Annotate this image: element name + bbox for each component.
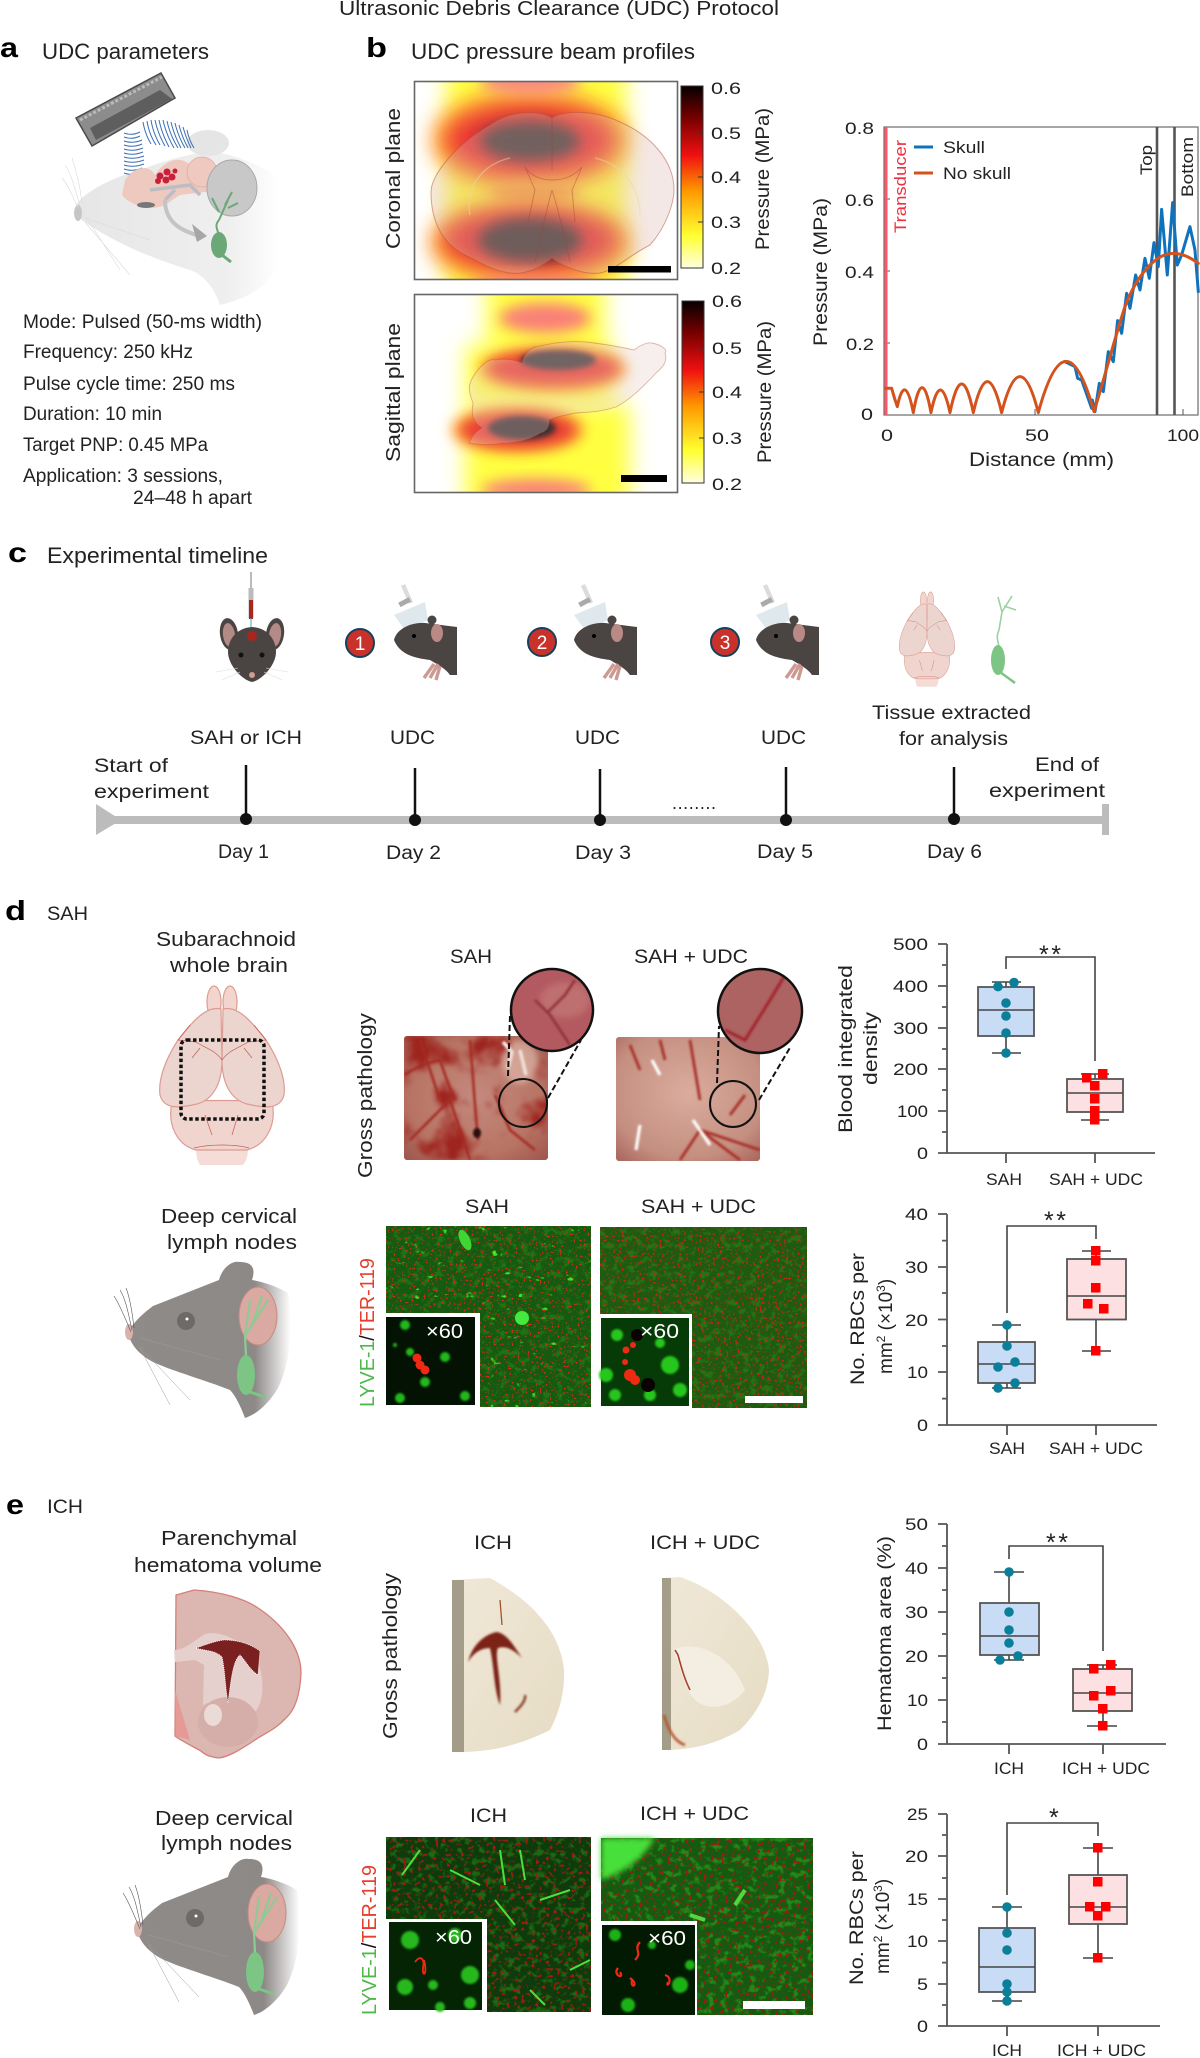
badge: 2: 2 (537, 633, 547, 654)
box plot: RBCs per mm2 in ICH (847, 1804, 1160, 2058)
micrograph: ICH + UDC (601, 1838, 813, 2015)
panel b: UDC pressure beam profiles (366, 32, 1199, 525)
panel d: SAH (5, 895, 1157, 1458)
coronal colour bar: 0.5 (711, 124, 741, 143)
box plot: RBCs per mm2 in ICH: 3 (871, 1885, 885, 1892)
box plot: blood integrated density: 300 (893, 1019, 928, 1038)
deep cervical lymph nodes heading (155, 1808, 293, 1855)
icon: mouse with transducer 2 (574, 585, 637, 680)
SAH column label: SAH (450, 947, 492, 968)
day labels: Day 3 (575, 843, 631, 864)
box plot: RBCs per mm2 in SAH: 3 (874, 1285, 888, 1292)
event labels: UDC (390, 728, 435, 749)
box plot: hematoma area: 10 (907, 1691, 928, 1710)
stain label: LYVE-1/TER-119 (357, 1258, 379, 1407)
event labels: for analysis (899, 729, 1008, 750)
deep cervical lymph nodes heading: Deep cervical (161, 1206, 297, 1228)
micrograph: ICH (386, 1837, 591, 2012)
gross pathology label: Gross pathology (355, 1013, 377, 1178)
box plot: hematoma area (875, 1515, 1166, 1778)
coronal colour bar: Pressure (MPa) (753, 108, 774, 250)
panel b heading: UDC pressure beam profiles (411, 39, 695, 64)
badge: 1 (346, 629, 374, 657)
stain label: LYVE-1/TER-119 (359, 1865, 381, 2015)
line chart: pressure vs distance: 100 (1167, 426, 1199, 445)
subarachnoid heading: whole brain (169, 955, 288, 977)
icon: lymph node neuron (991, 596, 1016, 683)
box plot: RBCs per mm2 in SAH: ** (1044, 1207, 1066, 1235)
photo: SAH + UDC brain surface (616, 1037, 760, 1161)
box plot: RBCs per mm2 in SAH: mm (876, 1342, 897, 1374)
box plot: RBCs per mm2 in ICH: 25 (907, 1805, 928, 1824)
coronal colour bar: 0.3 (711, 213, 741, 232)
panel c label: c (8, 537, 27, 568)
panel e label: e (6, 1489, 24, 1520)
box plot: RBCs per mm2 in ICH: 2 (871, 1935, 885, 1942)
box plot: RBCs per mm2 in ICH: 15 (907, 1890, 928, 1909)
box plot: hematoma area: 50 (905, 1515, 928, 1534)
box plot: blood integrated density: SAH + UDC (1049, 1170, 1143, 1189)
ICH microscopy label: ICH (470, 1806, 507, 1827)
line chart: pressure vs distance: Skull (943, 138, 985, 157)
box plot: RBCs per mm2 in SAH: No. RBCs per (848, 1252, 869, 1385)
deep cervical lymph nodes heading (161, 1206, 297, 1254)
parameter list: Mode: Pulsed (50-ms width) (23, 312, 262, 333)
deep cervical lymph nodes heading: Deep cervical (155, 1808, 293, 1830)
coronal colour bar: 0.4 (711, 168, 741, 187)
parameter list: 24–48 h apart (133, 488, 253, 509)
event labels (94, 703, 1106, 803)
box plot: RBCs per mm2 in SAH: 20 (905, 1311, 928, 1330)
panel a label: a (0, 32, 18, 63)
sagittal colour bar: 0.5 (712, 339, 742, 358)
box plot: blood integrated density: SAH (986, 1170, 1022, 1189)
panel a heading: UDC parameters (42, 39, 209, 64)
line chart: pressure vs distance: Bottom (1178, 137, 1197, 197)
sagittal heatmap (414, 294, 678, 494)
line chart: pressure vs distance: 0.8 (845, 119, 874, 138)
line chart: pressure vs distance: 50 (1025, 426, 1049, 445)
box plot: blood integrated density: 0 (917, 1144, 928, 1163)
day labels: Day 1 (218, 842, 269, 863)
icon: mouse with transducer 3 (756, 585, 819, 680)
box plot: RBCs per mm2 in ICH: 10 (907, 1932, 928, 1951)
panel e heading: ICH (47, 1497, 83, 1518)
box plot: RBCs per mm2 in SAH: ) (876, 1279, 897, 1285)
box plot: hematoma area: 0 (917, 1735, 928, 1754)
magnified inset: SAH (508, 969, 593, 1098)
box plot: RBCs per mm2 in SAH: 40 (905, 1205, 928, 1224)
ICH column label: ICH (474, 1533, 512, 1554)
day labels: Day 6 (927, 842, 982, 863)
panel e: ICH (6, 1489, 1166, 2058)
parameter list: Frequency: 250 kHz (23, 342, 193, 363)
box plot: blood integrated density: density (861, 1011, 882, 1085)
line chart: pressure vs distance: No skull (943, 164, 1011, 183)
event labels: SAH or ICH (190, 728, 302, 749)
box plot: hematoma area: ICH (994, 1759, 1024, 1778)
box plot: blood integrated density: ** (1039, 941, 1061, 969)
box plot: RBCs per mm2 in ICH: 5 (917, 1975, 928, 1994)
event labels: Tissue extracted (872, 703, 1031, 724)
panel b label: b (366, 32, 387, 63)
gross pathology label: Gross pathology (380, 1573, 402, 1739)
sagittal colour bar: 0.2 (712, 475, 742, 494)
coronal plane label: Coronal plane (383, 108, 405, 249)
event labels: Start of (94, 756, 169, 777)
subarachnoid heading (156, 929, 296, 977)
panel c heading: Experimental timeline (47, 543, 268, 568)
deep cervical lymph nodes heading: lymph nodes (167, 1232, 297, 1254)
coronal heatmap (414, 80, 678, 280)
parameter list: Target PNP: 0.45 MPa (23, 435, 208, 456)
box plot: RBCs per mm2 in ICH: 0 (917, 2017, 928, 2036)
line chart: pressure vs distance: 0.6 (845, 191, 874, 210)
box plot: RBCs per mm2 in ICH: (×10 (873, 1892, 894, 1936)
subarachnoid heading: Subarachnoid (156, 929, 296, 951)
box plot: RBCs per mm2 in ICH: No. RBCs per (847, 1850, 868, 1985)
box plot: RBCs per mm2 in SAH (848, 1205, 1157, 1458)
box plot: RBCs per mm2 in SAH: 10 (907, 1363, 928, 1382)
sagittal colour bar: 0.3 (712, 429, 742, 448)
parameter list: Pulse cycle time: 250 ms (23, 374, 235, 395)
icon: extracted brain (899, 592, 955, 687)
box plot: RBCs per mm2 in ICH: ) (873, 1879, 894, 1885)
ICH + UDC microscopy label: ICH + UDC (640, 1804, 749, 1825)
box plot: RBCs per mm2 in SAH: SAH (989, 1439, 1025, 1458)
line chart: pressure vs distance: Pressure (MPa) (811, 198, 832, 346)
icon: whole brain with dotted region (160, 986, 284, 1165)
badge: 3 (711, 628, 739, 656)
photo: SAH brain surface (404, 1036, 548, 1160)
magnified inset: SAH + UDC (717, 969, 802, 1100)
ICH + UDC column label: ICH + UDC (650, 1533, 760, 1554)
micrograph: SAH + UDC (599, 1227, 807, 1408)
line chart: pressure vs distance: Transducer (891, 140, 910, 233)
box plot: hematoma area: ICH + UDC (1062, 1759, 1150, 1778)
illustration: transducer over mouse head (62, 73, 280, 305)
box plot: blood integrated density: 500 (893, 935, 928, 954)
micrograph: SAH + UDC: ×60 (640, 1321, 679, 1343)
event labels: UDC (575, 728, 620, 749)
line chart: pressure vs distance: 0.4 (845, 263, 874, 282)
micrograph: ICH: ×60 (435, 1927, 472, 1949)
icon: grey mouse with lymph node (114, 1262, 291, 1418)
day labels: Day 5 (757, 842, 813, 863)
day labels: Day 2 (386, 843, 441, 864)
box plot: RBCs per mm2 in SAH: 30 (905, 1258, 928, 1277)
coronal colour bar: 0.2 (711, 259, 741, 278)
badge: 2 (528, 628, 556, 656)
box plot: RBCs per mm2 in SAH: 2 (874, 1335, 888, 1342)
micrograph: ICH + UDC: ×60 (648, 1928, 686, 1950)
box plot: RBCs per mm2 in ICH: 20 (905, 1847, 928, 1866)
SAH + UDC column label: SAH + UDC (634, 947, 748, 968)
parenchymal hematoma heading: hematoma volume (134, 1555, 322, 1577)
box plot: blood integrated density: 100 (897, 1102, 928, 1121)
coronal colour bar: 0.6 (711, 79, 741, 98)
line chart: pressure vs distance: 0.2 (846, 335, 874, 354)
line chart: pressure vs distance: 0 (881, 426, 893, 445)
parameter list: Application: 3 sessions, (23, 466, 223, 487)
box plot: hematoma area: 40 (905, 1559, 928, 1578)
icon: mouse with transducer 1 (394, 585, 457, 680)
line chart: pressure vs distance: 0 (861, 405, 873, 424)
panel d heading: SAH (47, 904, 88, 925)
panel c: experimental timeline (8, 537, 1109, 864)
box plot: hematoma area: 30 (905, 1603, 928, 1622)
line chart: pressure vs distance: Top (1137, 145, 1156, 175)
micrograph: SAH (386, 1226, 591, 1407)
deep cervical lymph nodes heading: lymph nodes (161, 1833, 292, 1855)
box plot: RBCs per mm2 in SAH: (×10 (876, 1292, 897, 1336)
SAH microscopy label: SAH (465, 1197, 509, 1218)
parameter list: Duration: 10 min (23, 404, 162, 425)
sagittal colour bar: Pressure (MPa) (755, 321, 776, 463)
box plot: RBCs per mm2 in ICH: mm (873, 1942, 894, 1974)
icon: mouse head with syringe (216, 572, 288, 682)
event labels: experiment (94, 782, 210, 803)
box plot: blood integrated density (836, 935, 1155, 1189)
event labels: experiment (989, 781, 1106, 802)
box plot: RBCs per mm2 in SAH: SAH + UDC (1049, 1439, 1143, 1458)
event labels: UDC (761, 728, 806, 749)
box plot: hematoma area: ** (1046, 1529, 1068, 1557)
timeline bar (96, 765, 1109, 835)
panel a: UDC parameters (0, 32, 280, 509)
box plot: hematoma area: Hematoma area (%) (875, 1536, 896, 1731)
badge: 3: 3 (720, 633, 730, 654)
sagittal colour bar (682, 292, 776, 494)
sagittal colour bar: 0.6 (712, 292, 742, 311)
micrograph: SAH: ×60 (426, 1321, 463, 1343)
icon: grey mouse with lymph node (123, 1859, 300, 2015)
coronal colour bar (681, 79, 774, 278)
box plot: hematoma area: 20 (905, 1647, 928, 1666)
day labels (218, 842, 982, 864)
photo: ICH + UDC tissue slice (662, 1577, 769, 1750)
event labels: End of (1035, 755, 1100, 776)
box plot: blood integrated density: Blood integrated (836, 965, 857, 1133)
photo: ICH tissue slice (452, 1578, 564, 1752)
icon: half brain with hematoma (174, 1590, 301, 1758)
box plot: blood integrated density: 400 (893, 977, 928, 996)
SAH + UDC microscopy label: SAH + UDC (641, 1197, 756, 1218)
parenchymal hematoma heading: Parenchymal (161, 1528, 297, 1550)
sagittal plane label: Sagittal plane (383, 323, 405, 462)
parenchymal hematoma heading (134, 1528, 322, 1577)
timeline bar: ........ (672, 793, 716, 813)
badge: 1: 1 (355, 634, 365, 655)
box plot: RBCs per mm2 in SAH: 0 (917, 1416, 928, 1435)
sagittal colour bar: 0.4 (712, 383, 742, 402)
panel d label: d (5, 895, 26, 926)
line chart: pressure vs distance (811, 119, 1199, 471)
line chart: pressure vs distance: Distance (mm) (969, 450, 1114, 471)
parameter list (23, 312, 262, 509)
box plot: blood integrated density: 200 (893, 1060, 928, 1079)
box plot: RBCs per mm2 in ICH: * (1049, 1804, 1059, 1832)
